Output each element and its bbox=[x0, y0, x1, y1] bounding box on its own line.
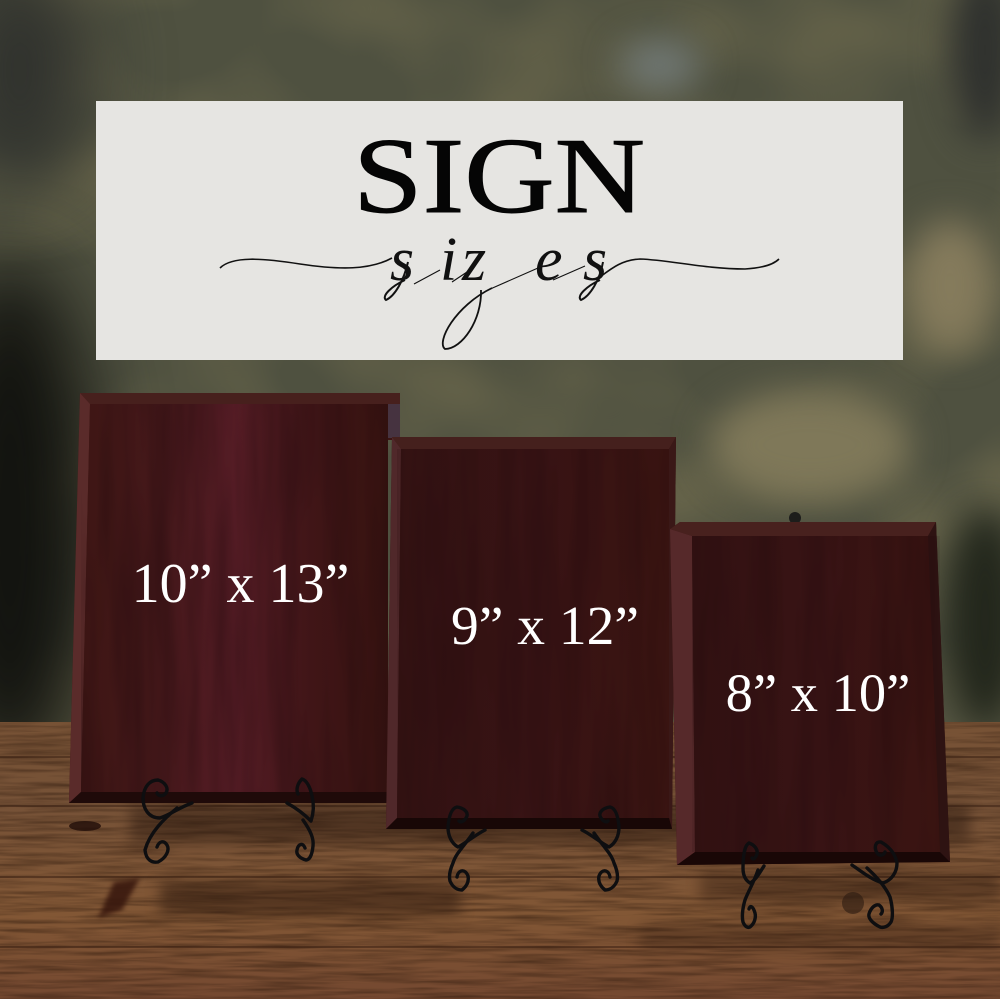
script subheading: sizes bbox=[220, 226, 779, 349]
easel stand: large bbox=[143, 779, 313, 862]
plaque: 10 x 13 bbox=[69, 393, 400, 803]
right scroll bbox=[582, 807, 619, 890]
title panel bbox=[96, 101, 903, 360]
heading: SIGN: SIGN bbox=[353, 117, 645, 236]
wooden table bbox=[0, 722, 1000, 999]
plaque: 9 x 12 bbox=[386, 437, 676, 829]
easel stand: medium bbox=[448, 807, 619, 890]
backdrop: mottled painted canvas bbox=[0, 0, 1000, 780]
size label: 9” x 12” bbox=[451, 596, 639, 657]
size label: 10” x 13” bbox=[132, 553, 349, 615]
plaque: 8 x 10 bbox=[670, 512, 950, 865]
left scroll bbox=[448, 807, 485, 890]
size label: 8” x 10” bbox=[726, 662, 910, 723]
script subheading: sizes: sizes bbox=[390, 226, 607, 294]
easel stand: small bbox=[742, 842, 897, 927]
